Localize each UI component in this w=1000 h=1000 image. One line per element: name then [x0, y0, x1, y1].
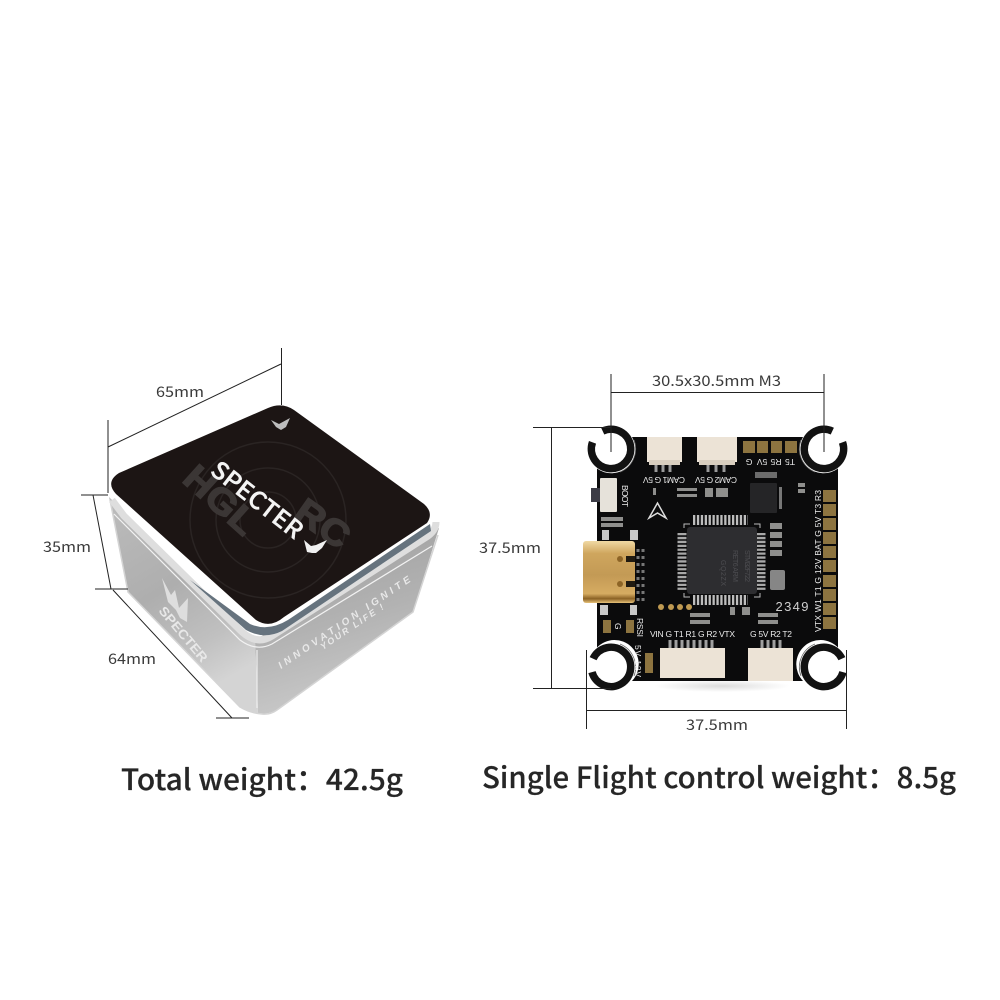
small components — [601, 483, 805, 624]
crystal — [770, 570, 785, 590]
dimension: vertical 37.5mm: 37.5mm — [479, 537, 541, 558]
dimension: 65mm — [108, 348, 282, 493]
microcontroller chip: STM32F722 — [743, 550, 750, 582]
box side print: SPECTER: SPECTER — [156, 603, 211, 666]
bottom labels — [613, 618, 792, 677]
date code: 2349 — [776, 599, 808, 614]
lid watermark: HGL: HGL — [176, 456, 266, 543]
mounting ring: top left — [591, 429, 636, 472]
dimension: 35mm: 35mm — [43, 536, 91, 557]
microcontroller chip: GQ2ZX — [719, 560, 726, 586]
microcontroller chip: RET6 ARM — [731, 550, 738, 582]
dimension: 64mm: 64mm — [108, 648, 156, 669]
boot button: BOOT — [620, 485, 630, 507]
box body — [109, 497, 439, 714]
bottom left pads — [603, 620, 653, 673]
box lid — [111, 405, 430, 624]
top pad labels: G — [746, 457, 752, 467]
bottom connectors — [660, 640, 793, 681]
top pad labels: 5V — [756, 457, 767, 467]
box side print: slogan: INNOVATION IGNITE — [277, 574, 413, 671]
bottom labels: RSSI — [635, 618, 645, 637]
right pads — [823, 490, 836, 629]
top pad labels: CAM2 G 5V — [695, 475, 737, 485]
arrow logo — [649, 503, 666, 518]
lid logo — [304, 540, 327, 553]
top pad labels — [643, 457, 795, 485]
small logo — [271, 418, 290, 430]
panel: flight controller with dimensions — [479, 370, 847, 735]
dimension: 30.5x30.5mm M3 — [611, 370, 824, 452]
dimension: 30.5x30.5mm M3: 30.5x30.5mm M3 — [652, 370, 781, 391]
mounting ring: bottom left — [592, 644, 636, 687]
board shadow — [654, 680, 790, 692]
top pad labels: R5 — [770, 457, 781, 467]
mounting ring: bottom right — [799, 644, 843, 687]
panel: plastic box with dimensions — [43, 348, 439, 718]
dimension: 35mm — [43, 495, 128, 589]
gyro chip — [750, 472, 782, 513]
caption: total weight: Total weight：42.5g — [121, 757, 403, 799]
USB-C connector — [583, 530, 643, 615]
bottom labels: G 5V R2 T2 — [750, 629, 792, 639]
top pad labels: CAM1 G 5V — [643, 475, 685, 485]
mounting ring: top right — [799, 429, 844, 472]
top pads — [743, 441, 797, 453]
top pad labels: T5 — [785, 457, 795, 467]
bottom labels: VIN G T1 R1 G R2 VTX — [650, 629, 735, 639]
caption: single flight control weight: Single Flight control weight：8.5g — [482, 755, 956, 797]
right pad labels: VTX W1 T1 G 12V BAT G 5V T3 R3 — [813, 490, 823, 632]
dimension: horizontal 37.5mm: 37.5mm — [686, 714, 748, 735]
dimension: vertical 37.5mm — [479, 427, 611, 689]
microcontroller chip — [682, 520, 761, 600]
bottom labels: G — [613, 623, 623, 630]
board body — [597, 437, 838, 681]
dimension: 65mm: 65mm — [156, 381, 204, 402]
bottom labels: 5V 12V — [633, 645, 643, 677]
lid text: SPECTER: SPECTER — [205, 451, 312, 546]
lid watermark: RC: RC — [287, 490, 358, 557]
dimension: horizontal 37.5mm — [586, 650, 847, 735]
dimension: 64mm — [108, 590, 249, 718]
top connectors — [647, 437, 737, 472]
box side print: slogan: YOUR LIFE ! — [319, 602, 385, 652]
boot button — [591, 478, 630, 512]
box side logo — [162, 578, 188, 622]
